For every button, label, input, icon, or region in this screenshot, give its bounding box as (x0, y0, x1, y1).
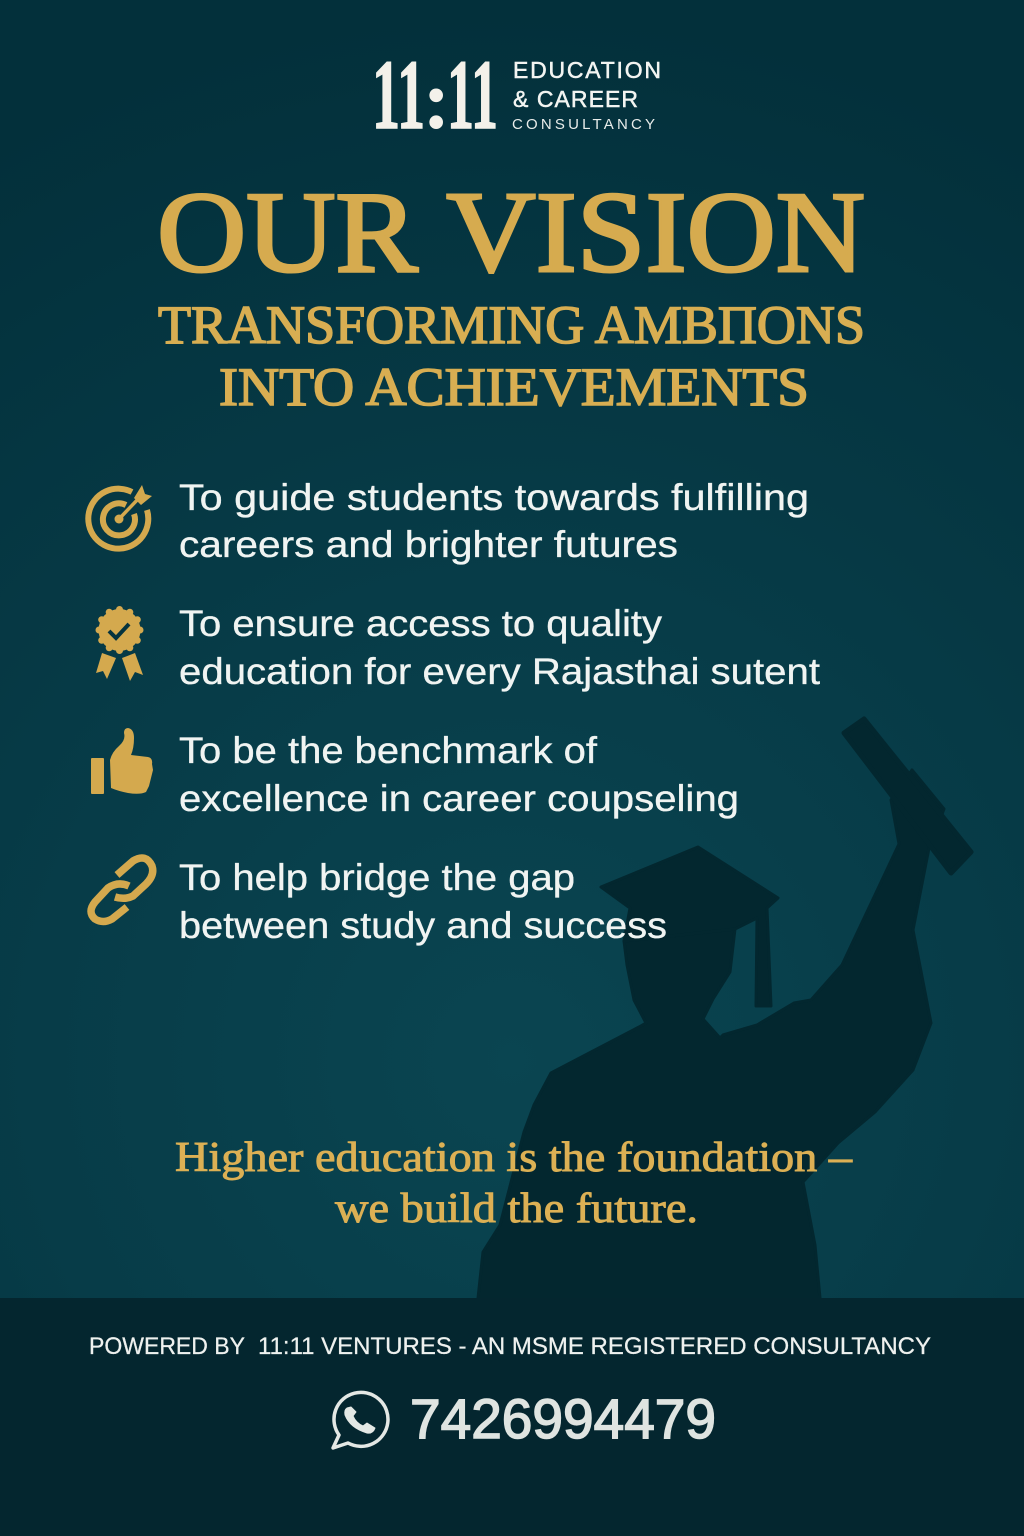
logo: & CAREER (513, 86, 638, 112)
text: To guide students towards fulfilling (179, 476, 809, 518)
text: To ensure access to quality (179, 602, 662, 644)
icon: thumbs up (91, 728, 153, 794)
logo (372, 39, 661, 150)
logo: CONSULTANCY (512, 116, 655, 133)
subtitle (158, 295, 865, 417)
phone number: 7426994479 (410, 1387, 716, 1450)
subtitle: TRANSFORMING AMBΠONS (158, 295, 865, 355)
vision item 3 (91, 728, 739, 819)
logo: 11 (372, 39, 425, 150)
quote: Higher education is the foundation – (175, 1135, 853, 1181)
icon: rosette (96, 606, 144, 681)
icon: target (88, 485, 152, 549)
footer credit: 11:11 VENTURES - AN MSME REGISTERED CONSULTANCY (258, 1333, 931, 1360)
text (179, 602, 821, 692)
logo: 11 (447, 39, 498, 150)
subtitle: INTO ACHIEVEMENTS (219, 357, 809, 417)
text (179, 856, 667, 946)
logo: EDUCATION (513, 57, 661, 83)
quote (175, 1135, 853, 1232)
vision item 2 (96, 602, 821, 692)
graduate silhouette (478, 719, 971, 1298)
quote: we build the future. (335, 1186, 698, 1232)
text: between study and success (179, 904, 667, 946)
footer band (0, 1298, 1024, 1536)
text: careers and brighter futures (179, 523, 678, 565)
text (179, 729, 739, 819)
text: excellence in career coupseling (179, 777, 739, 819)
title: OUR VISION (157, 169, 865, 297)
text: education for every Rajasthai sutent (179, 650, 821, 692)
text: To help bridge the gap (179, 856, 575, 898)
logo: : (423, 54, 450, 147)
text: To be the benchmark of (179, 729, 598, 771)
icon: whatsapp (333, 1392, 388, 1448)
icon: chain link (91, 858, 153, 922)
vision item 1 (88, 476, 809, 565)
text (179, 476, 809, 565)
vision item 4 (91, 856, 667, 946)
footer credit: POWERED BY (89, 1333, 245, 1360)
